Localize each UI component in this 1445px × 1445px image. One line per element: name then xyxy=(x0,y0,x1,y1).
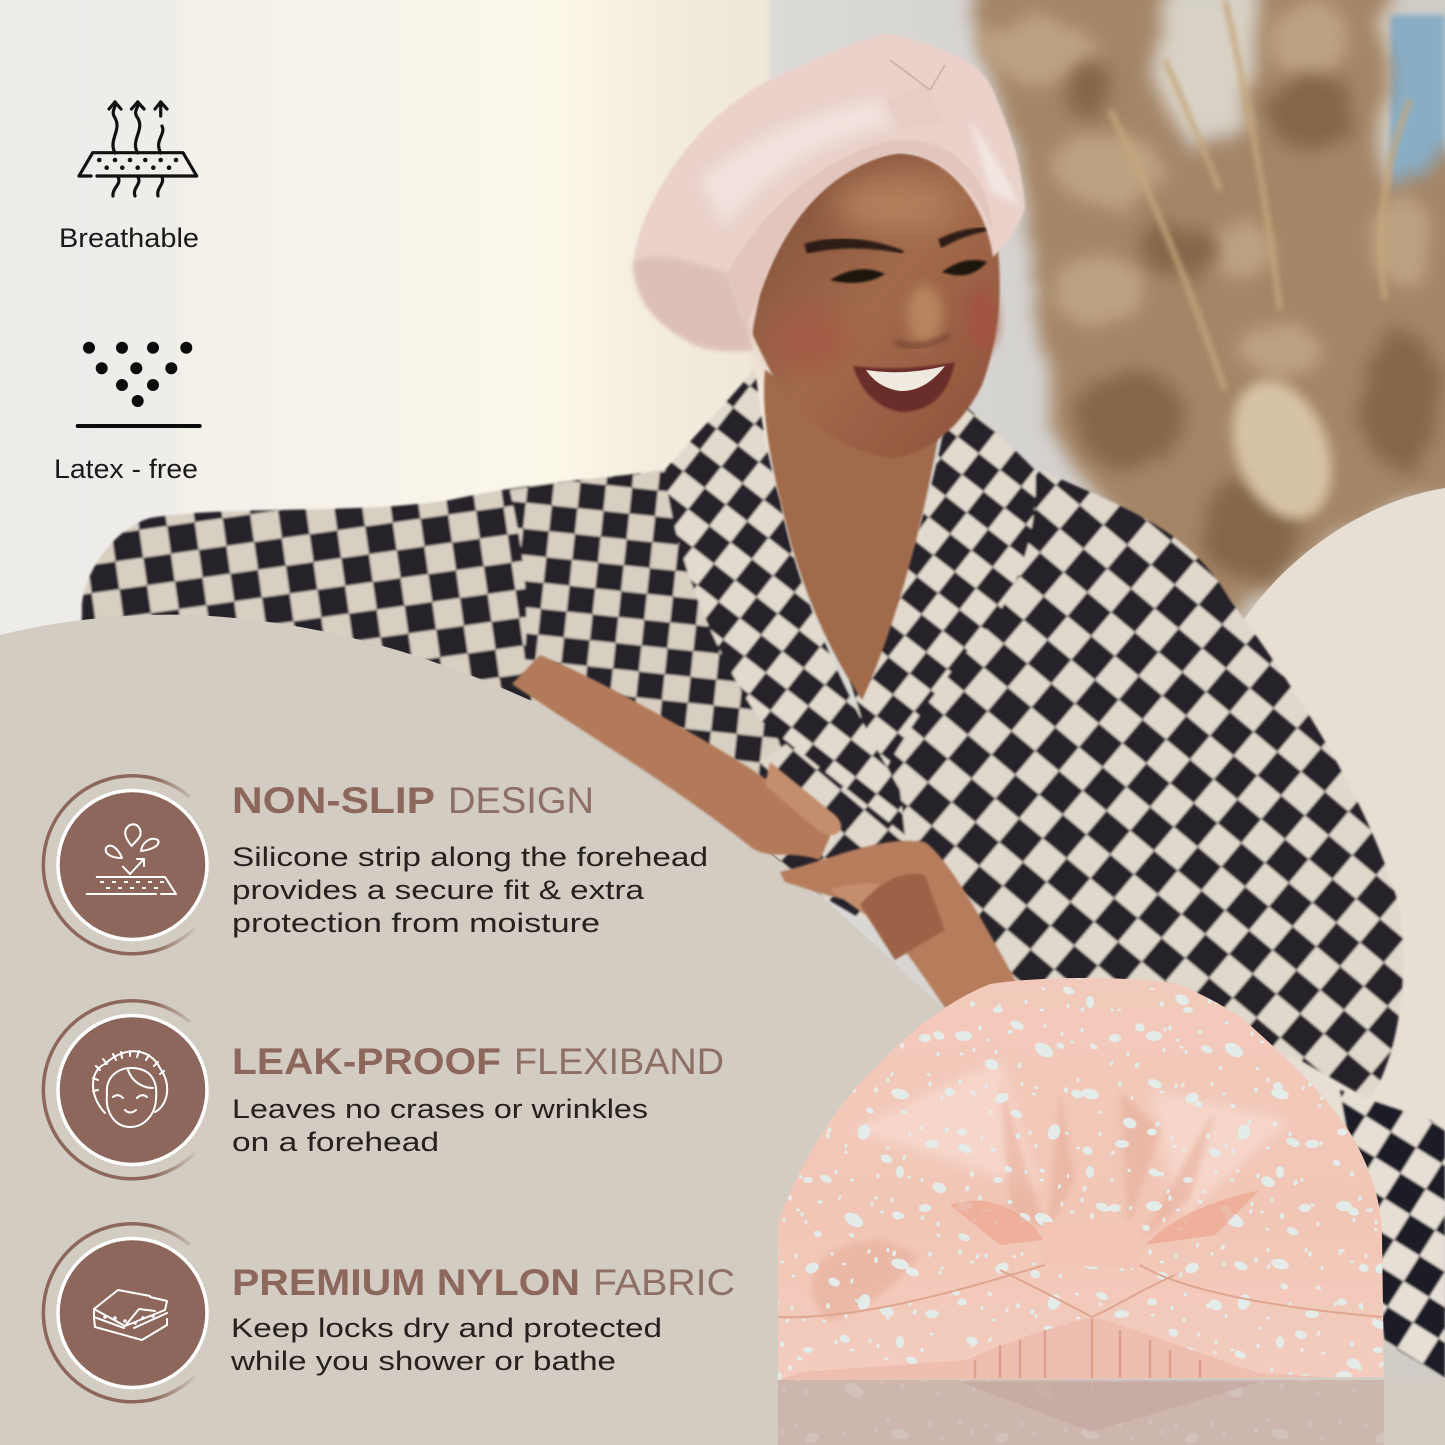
heading: LEAK-PROOF xyxy=(232,1041,501,1082)
feature: premium nylon fabric xyxy=(43,1224,735,1402)
label: latex free: Latex - free xyxy=(54,454,198,484)
heading xyxy=(232,780,594,821)
model: neck and chest xyxy=(764,370,945,700)
chair xyxy=(1240,488,1445,1200)
body text: Keep locks dry and protected xyxy=(231,1313,662,1343)
heading xyxy=(232,1041,724,1082)
beige panel xyxy=(0,615,1445,1445)
model: shower cap xyxy=(633,33,1025,351)
model: robe xyxy=(80,368,1445,1378)
heading: FLEXIBAND xyxy=(514,1041,724,1082)
body text: provides a secure fit & extra xyxy=(232,875,645,905)
heading: FABRIC xyxy=(593,1262,735,1303)
body text: Silicone strip along the forehead xyxy=(232,842,708,872)
reflection xyxy=(778,1380,1384,1445)
body text: while you shower or bathe xyxy=(230,1346,616,1376)
label: breathable: Breathable xyxy=(59,223,199,253)
feature: leak-proof flexiband xyxy=(43,1001,724,1179)
product: pink cap xyxy=(770,970,1390,1445)
heading: DESIGN xyxy=(448,780,594,821)
heading xyxy=(232,1262,735,1303)
icon: fabric badge xyxy=(43,1224,207,1402)
model: arm and hands xyxy=(512,655,1018,1008)
body text: Leaves no crases or wrinkles xyxy=(232,1094,648,1124)
body text: on a forehead xyxy=(232,1127,439,1157)
body text: protection from moisture xyxy=(232,908,600,938)
body text xyxy=(230,1313,662,1376)
icon: breathable xyxy=(79,102,197,196)
icon: non-slip badge xyxy=(43,776,207,954)
heading: PREMIUM NYLON xyxy=(232,1262,580,1303)
icon: latex free xyxy=(76,342,202,428)
body text xyxy=(232,1094,648,1157)
heading: NON-SLIP xyxy=(232,780,435,821)
body text xyxy=(232,842,708,938)
icon: leak-proof badge xyxy=(43,1001,207,1179)
model: face xyxy=(745,153,1000,458)
feature: non-slip design xyxy=(43,776,708,954)
